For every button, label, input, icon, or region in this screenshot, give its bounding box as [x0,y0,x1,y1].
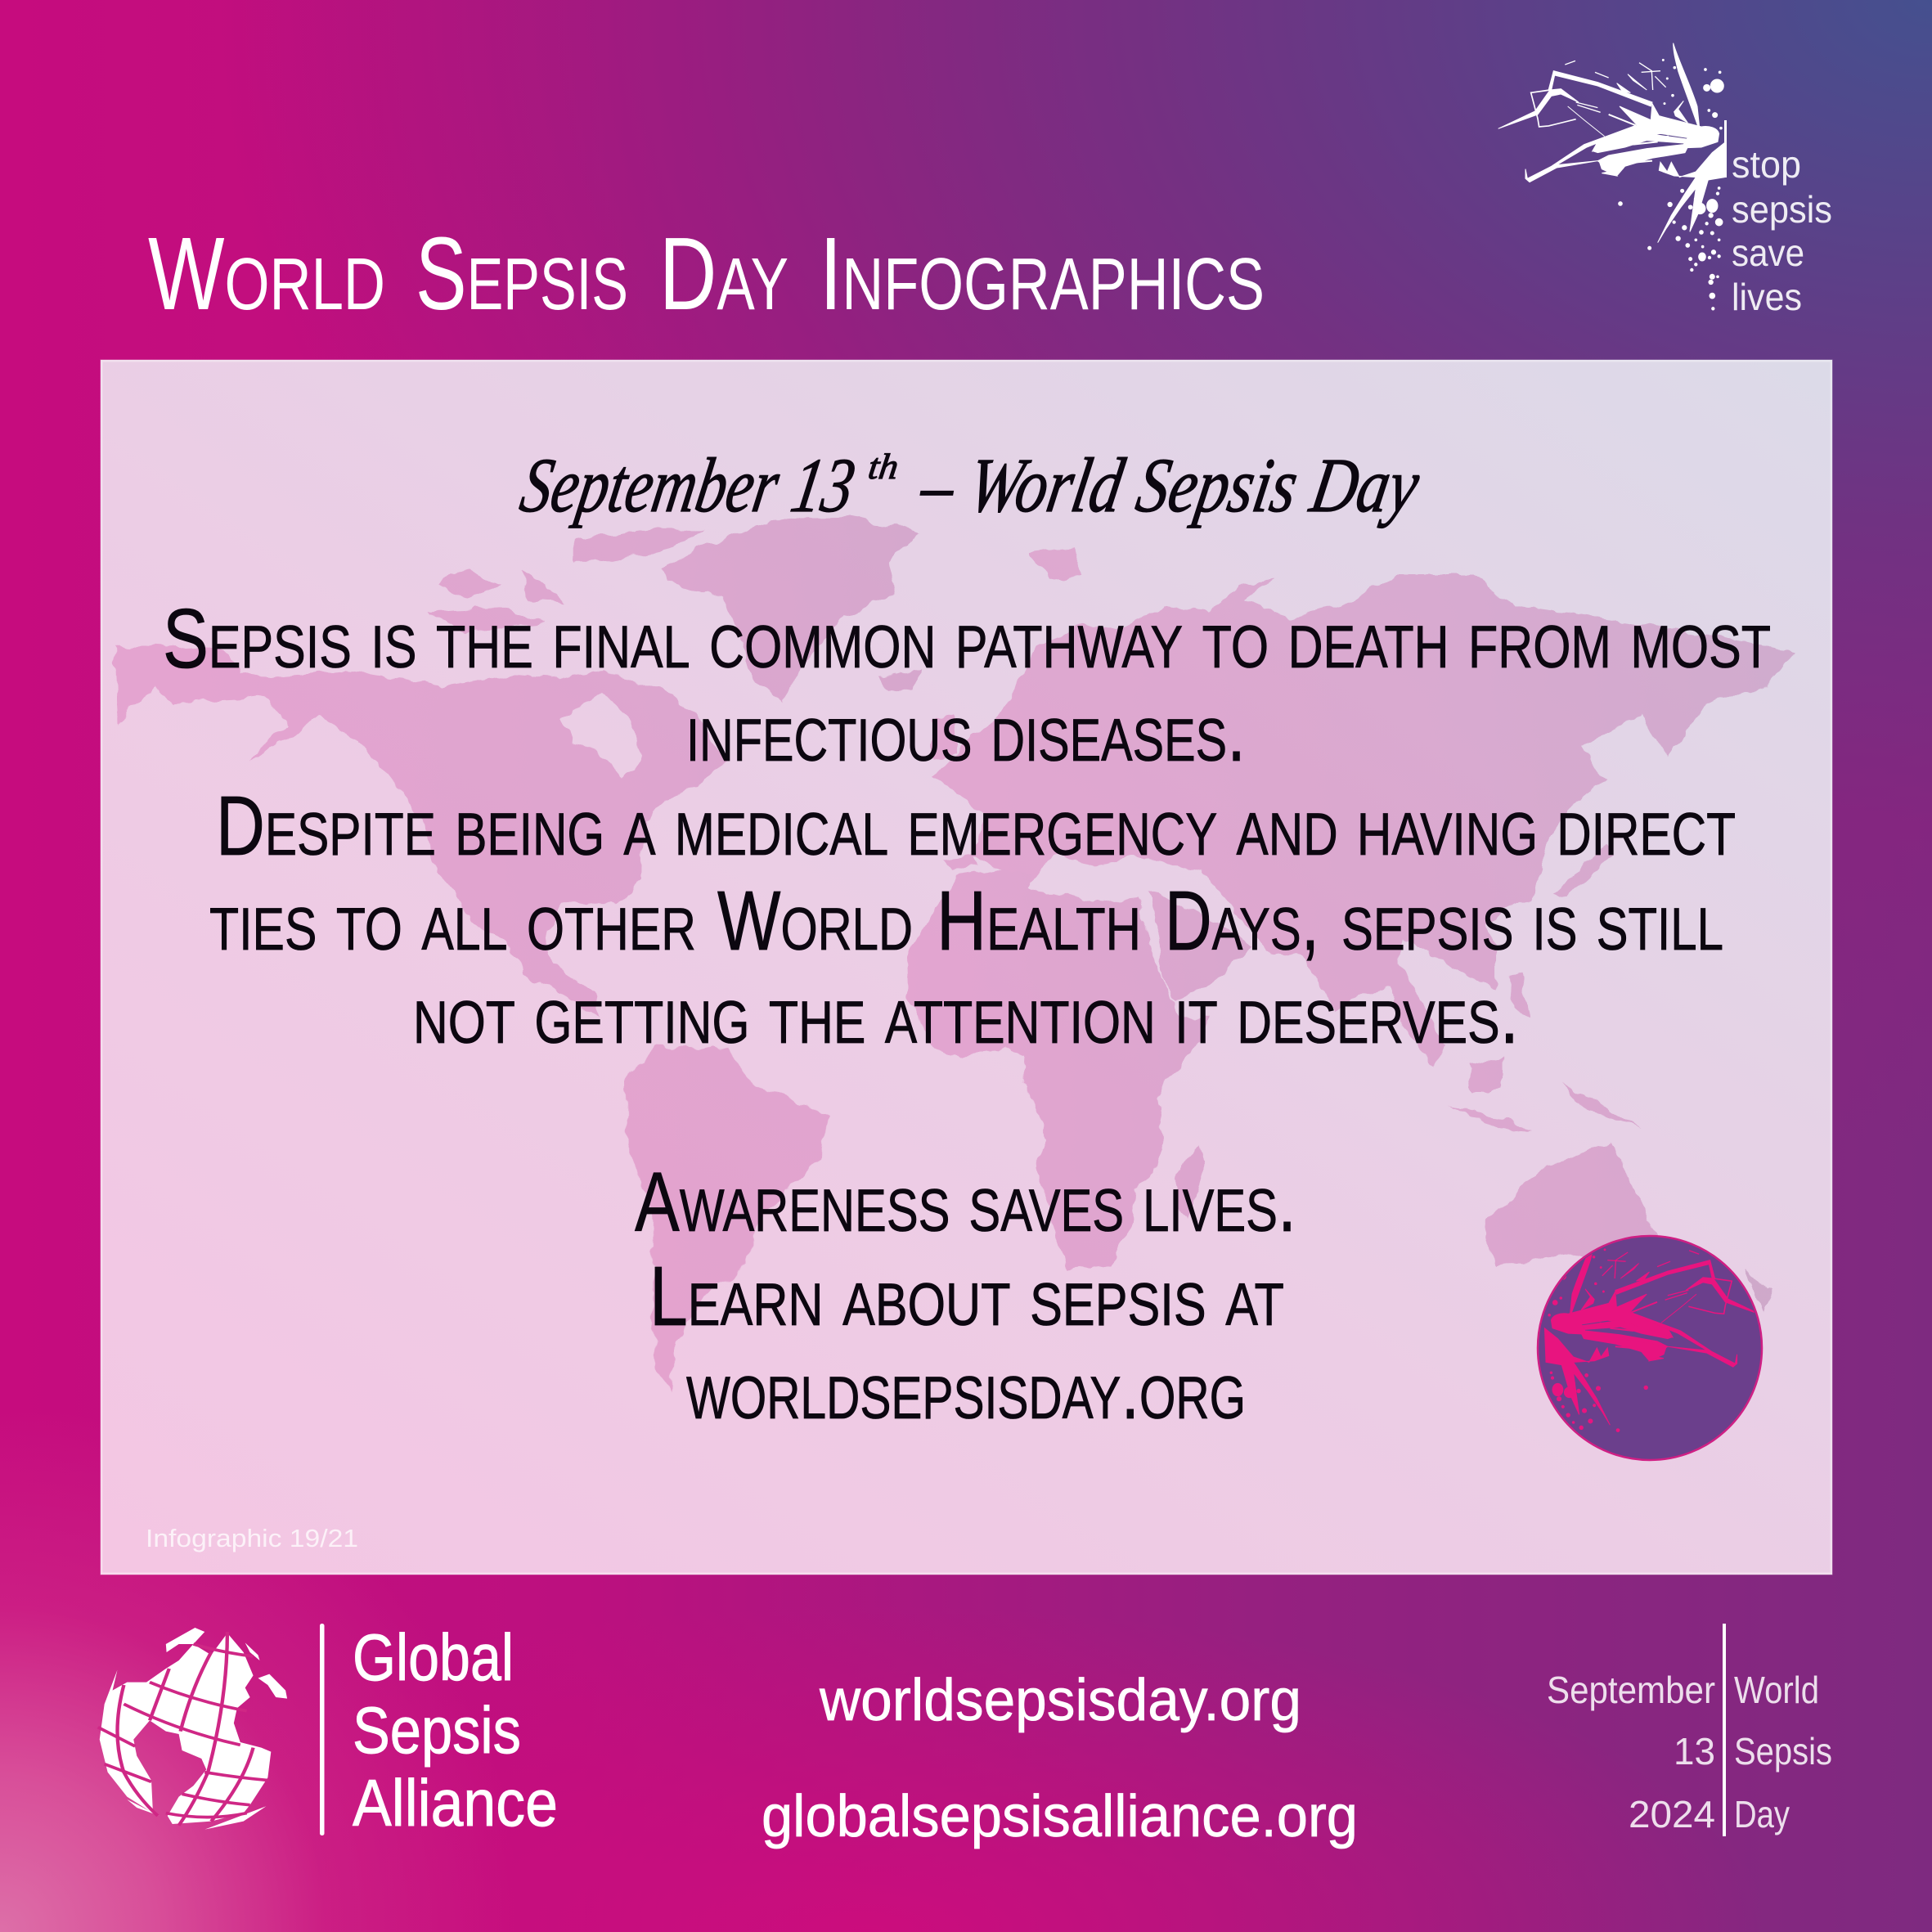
text block: sepsis statement [163,591,1771,1062]
text block: awareness call to action [635,1155,1296,1437]
logo: Global Sepsis Alliance: Alliance [353,1767,558,1840]
world map watermark [115,518,1795,1392]
icon: purple circle with pink splash [1536,1235,1764,1461]
text block: sepsis statement: Health [937,874,1141,968]
text block: sepsis statement: World [717,874,913,968]
text block: sepsis statement: ties to all other [209,874,696,968]
date block: September 13 2024 World Sepsis Day [1547,1624,1832,1836]
date block: September 13 2024 World Sepsis Day: 13 [1674,1730,1715,1772]
subtitle: September 13th World Sepsis Day: September 13 [514,443,861,528]
heading: World Sepsis Day Infographics: World [148,214,385,332]
label: infographic number: Infographic 19/21 [146,1524,358,1552]
date block: September 13 2024 World Sepsis Day: 2024 [1629,1793,1715,1835]
heading: World Sepsis Day Infographics [148,214,1265,332]
text block: sepsis statement: infectious diseases. [686,685,1246,780]
logo: Global Sepsis Alliance: Sepsis [353,1694,521,1768]
logo: stop sepsis save lives: save [1732,231,1804,274]
icon: white paint splash [1498,43,1726,310]
text block: awareness call to action: Learn about sepsis at [649,1249,1284,1344]
date block: September 13 2024 World Sepsis Day: Sepsis [1734,1730,1832,1772]
logo: Global Sepsis Alliance: Global [353,1621,514,1695]
logo: Global Sepsis Alliance [98,1621,558,1840]
panel: main content card [101,360,1832,1575]
date block: September 13 2024 World Sepsis Day: September [1547,1669,1715,1711]
text block: website links: worldsepsisday.org [819,1668,1301,1733]
subtitle: September 13th World Sepsis Day: th [866,447,901,487]
text block: sepsis statement: not getting the attention it deserves. [413,967,1519,1062]
date block: September 13 2024 World Sepsis Day: Day [1734,1793,1790,1835]
heading: World Sepsis Day Infographics: Infographics [820,214,1265,332]
heading: World Sepsis Day Infographics: Sepsis [416,214,628,332]
subtitle: September 13th World Sepsis Day: – World Sepsis Day [914,443,1426,528]
text block: website links: globalsepsisalliance.org [762,1784,1358,1849]
icon: globe [98,1628,287,1830]
date block: September 13 2024 World Sepsis Day: World [1734,1669,1819,1711]
text block: website links [762,1668,1358,1849]
logo: stop sepsis save lives: stop [1732,143,1801,186]
logo: stop sepsis save lives [1498,43,1832,318]
text block: awareness call to action: Awareness saves lives. [635,1155,1296,1250]
subtitle: September 13th World Sepsis Day [514,443,1426,528]
text block: awareness call to action: worldsepsisday.org [686,1342,1246,1437]
text block: sepsis statement: Days, [1165,874,1319,968]
heading: World Sepsis Day Infographics: Day [659,214,789,332]
logo: stop sepsis save lives: sepsis [1732,188,1832,231]
text block: sepsis statement: sepsis is still [1341,874,1723,968]
logo: stop sepsis save lives: lives [1732,276,1802,318]
